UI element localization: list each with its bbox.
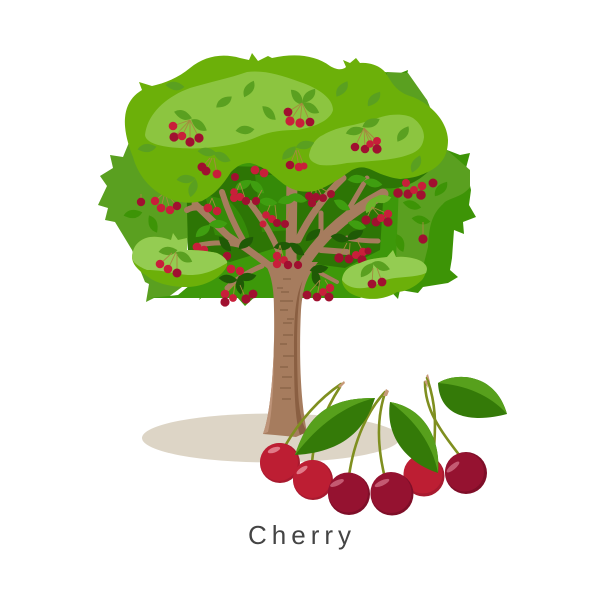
big cherry 6: [445, 452, 487, 494]
upper canopy: [125, 53, 448, 203]
bark marks: [277, 279, 294, 399]
cherry stems foreground: [285, 378, 460, 478]
canopy cherry stems: [173, 103, 377, 174]
blob cherries: [372, 268, 382, 284]
canopy light patch left: [145, 72, 333, 148]
canopy cherries: [169, 108, 410, 187]
inner crown dark area: [186, 165, 385, 268]
interior dark leaves: [193, 174, 392, 295]
right back foliage: [370, 70, 476, 299]
interior cherry stems: [141, 183, 423, 299]
inner crown mid patches: [205, 175, 300, 240]
big leaf right: [438, 377, 507, 418]
big cherry 5: [404, 454, 444, 496]
big cherry 4: [370, 472, 414, 516]
left foliage blob: [132, 233, 227, 287]
back foliage leaves: [123, 179, 450, 253]
stem tips: [338, 374, 430, 396]
right foliage blob: [342, 250, 427, 299]
blob cherries: [160, 252, 177, 273]
big leaf middle: [389, 402, 438, 473]
inner crown shade: [150, 160, 400, 298]
big cherry 2: [293, 460, 333, 500]
ground shadow: [142, 414, 400, 462]
canopy light patch right: [309, 115, 424, 165]
right back foliage light area: [379, 72, 470, 267]
label: Cherry: Cherry: [248, 520, 356, 550]
shade under right canopy lobe: [345, 165, 430, 188]
branches: [187, 175, 383, 288]
big leaf left: [295, 398, 375, 455]
big cherry 1: [260, 443, 300, 483]
bottom crown tufts: [199, 290, 258, 306]
interior cherries: [137, 178, 438, 307]
big cherry 3: [328, 472, 370, 515]
left back foliage: [98, 140, 190, 302]
tree trunk: [263, 262, 318, 437]
canopy leaves: [137, 79, 424, 198]
blob leaves: [158, 246, 178, 256]
blob leaves: [358, 260, 376, 280]
